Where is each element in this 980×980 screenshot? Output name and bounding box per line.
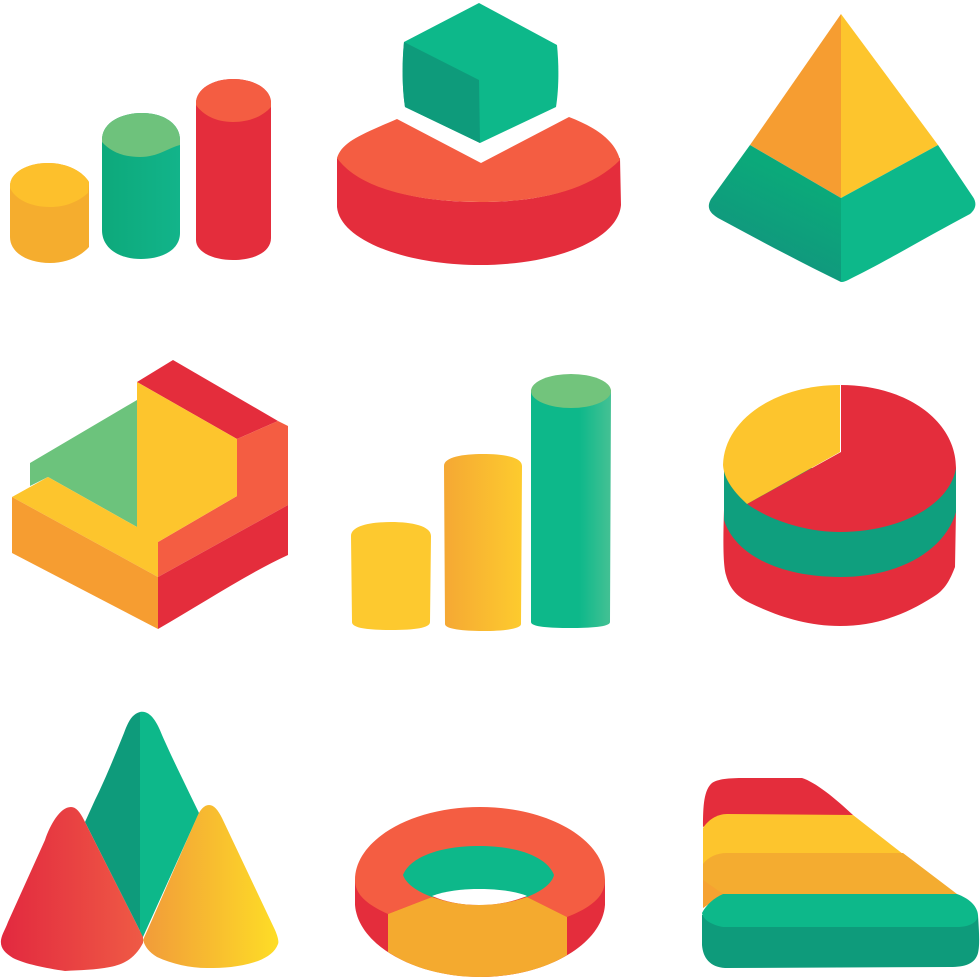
icon: isometric stepped block chart bbox=[12, 360, 288, 629]
orange medium column bbox=[444, 454, 522, 631]
green middle layer bbox=[724, 468, 956, 577]
yellow second layer bbox=[703, 814, 903, 870]
green tall column bbox=[531, 374, 611, 628]
icon: two-tier pyramid bbox=[709, 14, 975, 282]
green cube bbox=[403, 3, 558, 143]
green hole interior bbox=[403, 846, 554, 897]
red lower right face bbox=[158, 505, 288, 629]
green base top bbox=[702, 894, 978, 927]
orange lower left face bbox=[12, 497, 158, 629]
icon: layered stepped triangle bbox=[702, 778, 979, 968]
icon: stacked pie chart bbox=[723, 385, 956, 626]
red cone bbox=[1, 807, 143, 971]
yellow step surface bbox=[12, 382, 237, 577]
yellow cone bbox=[143, 805, 278, 968]
icon: donut ring chart bbox=[355, 807, 605, 977]
icon: cube above notched pie bbox=[337, 3, 621, 265]
orange-red top of ring bbox=[355, 807, 605, 917]
red pie top bbox=[747, 385, 956, 532]
notched pie base bbox=[337, 117, 621, 265]
green back cone left half bbox=[85, 712, 143, 937]
white hole opening bbox=[432, 889, 527, 905]
yellow right face bbox=[841, 14, 938, 198]
light green back wall bbox=[30, 400, 137, 527]
green base left face bbox=[709, 145, 841, 282]
yellow pie slice bbox=[723, 385, 840, 504]
green back cone right half bbox=[140, 712, 199, 937]
green base right face bbox=[841, 145, 975, 282]
red cylinder bbox=[196, 79, 271, 260]
icon: three rising column bars bbox=[351, 374, 611, 631]
yellow short column bbox=[351, 522, 431, 630]
icon: three-cylinder bar chart bbox=[10, 79, 271, 263]
yellow cylinder bbox=[10, 163, 89, 263]
red bottom layer bbox=[723, 510, 956, 626]
orange third layer bbox=[703, 853, 957, 908]
orange-red right wall bbox=[158, 421, 288, 577]
red top edge bbox=[137, 360, 278, 439]
orange front segment bbox=[388, 897, 567, 977]
icon: three cones bbox=[1, 712, 278, 971]
orange left face bbox=[750, 14, 841, 198]
red side of ring bbox=[355, 880, 605, 977]
green cylinder bbox=[102, 113, 180, 259]
dark green base side bbox=[702, 915, 979, 968]
red top layer bbox=[703, 778, 853, 827]
dark orange left sliver bbox=[703, 880, 723, 908]
